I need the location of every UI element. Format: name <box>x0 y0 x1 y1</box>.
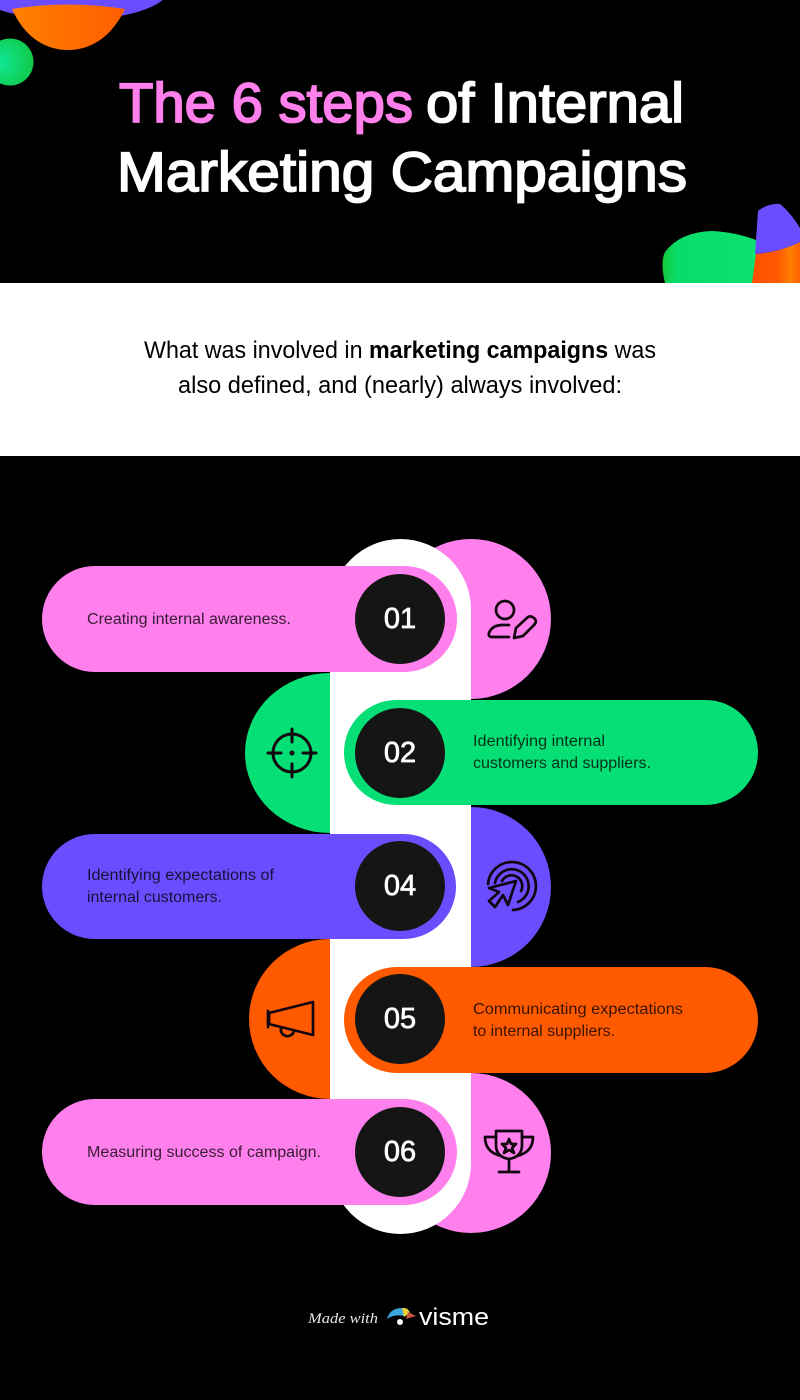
step 4 text: Identifying expectations of <box>87 867 275 884</box>
visme logo mark <box>387 1308 416 1325</box>
title: Marketing Campaigns <box>117 140 687 203</box>
step 6 icon tab <box>391 1073 551 1233</box>
step 5 badge <box>355 974 445 1064</box>
step 2 text: customers and suppliers. <box>473 755 651 772</box>
step 1 badge: 01 <box>384 603 416 635</box>
step 4 text <box>87 867 275 906</box>
title: of Internal <box>426 71 684 134</box>
step 5 text: to internal suppliers. <box>473 1023 615 1040</box>
step 6 bar <box>42 1099 457 1205</box>
step 2 text: Identifying internal <box>473 733 605 750</box>
icon: crosshair target <box>268 729 316 777</box>
step 4 icon tab <box>471 807 551 967</box>
step 4 badge <box>355 841 445 931</box>
step 6 text: Measuring success of campaign. <box>87 1144 321 1161</box>
icon: person with pencil <box>489 601 536 638</box>
step 5 icon tab <box>249 939 330 1099</box>
step 5 badge: 05 <box>384 1003 416 1035</box>
white central connector <box>330 539 471 1234</box>
step 1 badge <box>355 574 445 664</box>
step 1 bar <box>42 566 457 672</box>
step 4 text: internal customers. <box>87 889 222 906</box>
step 6 badge: 06 <box>384 1136 416 1168</box>
title: The 6 steps <box>119 71 413 134</box>
visme wordmark: visme <box>419 1304 489 1331</box>
intro text: also defined, and (nearly) always involved: <box>178 372 622 399</box>
step 2 badge: 02 <box>384 737 416 769</box>
footer: made with visme <box>307 1304 489 1331</box>
icon: trophy <box>485 1131 533 1172</box>
step 5 bar <box>344 967 758 1073</box>
step 4 badge: 04 <box>384 870 416 902</box>
step 5 text: Communicating expectations <box>473 1001 683 1018</box>
step 1 icon tab <box>391 539 551 699</box>
intro text: What was involved in marketing campaigns was <box>144 337 656 364</box>
decoration: bottom-right 3D shapes <box>662 204 800 283</box>
step 4 bar <box>42 834 456 939</box>
icon: target with cursor <box>488 862 536 910</box>
step 2 bar <box>344 700 758 805</box>
title <box>117 71 687 203</box>
step 2 badge <box>355 708 445 798</box>
step 2 icon tab <box>245 673 330 833</box>
step 6 badge <box>355 1107 445 1197</box>
step 2 text <box>473 733 651 772</box>
decoration: top-left 3D shapes <box>0 0 168 86</box>
steps diagram <box>42 539 758 1234</box>
footer label: Made with <box>307 1311 378 1327</box>
step 1 text: Creating internal awareness. <box>87 611 291 628</box>
step 5 text <box>473 1001 683 1040</box>
intro panel <box>0 283 800 456</box>
intro text <box>144 337 656 399</box>
icon: megaphone <box>268 1002 313 1036</box>
